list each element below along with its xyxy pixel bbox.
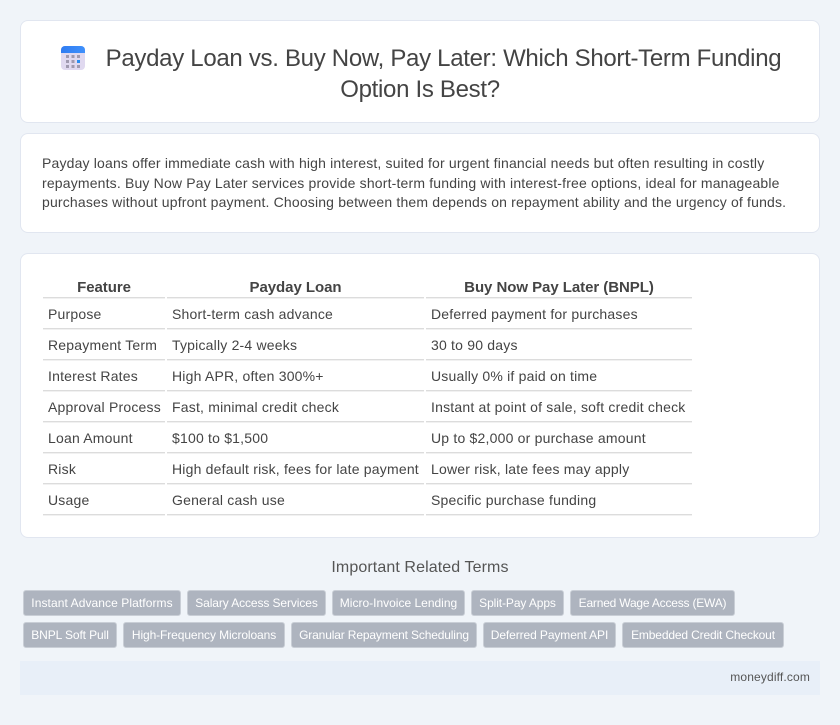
tag — [471, 590, 564, 616]
tag: Earned Wage Access (EWA) — [579, 596, 726, 610]
panel: description — [20, 133, 820, 233]
table: feature comparison: 30 to 90 days — [431, 337, 518, 353]
tag — [123, 622, 285, 648]
table: feature comparison — [43, 279, 692, 516]
tag — [622, 622, 784, 648]
tag: Micro-Invoice Lending — [340, 596, 457, 610]
tag: Instant Advance Platforms — [31, 596, 173, 610]
table: feature comparison: Repayment Term — [48, 337, 157, 353]
table: feature comparison: Specific purchase funding — [431, 492, 596, 508]
tag: BNPL Soft Pull — [31, 628, 109, 642]
table: feature comparison: Deferred payment for purchases — [431, 306, 638, 322]
table: feature comparison: Usually 0% if paid on time — [431, 368, 597, 384]
tag — [23, 590, 181, 616]
tag — [570, 590, 735, 616]
tag: Deferred Payment API — [491, 628, 608, 642]
table: feature comparison: Up to $2,000 or purchase amount — [431, 430, 646, 446]
text: summary paragraph: Payday loans offer immediate cash with high interest, suited for urgent financial needs but often resulting in costly — [42, 155, 764, 171]
table: feature comparison: Fast, minimal credit check — [172, 399, 339, 415]
title: Option Is Best? — [340, 76, 500, 103]
text: summary paragraph: purchases without upfront payment. Choosing between them depends on repayment ability and the urgency of funds. — [42, 194, 786, 210]
table: feature comparison: Usage — [48, 492, 89, 508]
table: feature comparison: General cash use — [172, 492, 285, 508]
tag: High-Frequency Microloans — [132, 628, 276, 642]
footer bar — [20, 661, 820, 695]
table: feature comparison: Purpose — [48, 306, 102, 322]
table: feature comparison: $100 to $1,500 — [172, 430, 268, 446]
tag group: related terms — [23, 590, 784, 648]
tag: Salary Access Services — [195, 596, 318, 610]
table: feature comparison: Risk — [48, 461, 76, 477]
table: feature comparison: Buy Now Pay Later (BNPL) — [464, 279, 654, 296]
title: Payday Loan vs. Buy Now, Pay Later: Which Short-Term Funding — [106, 45, 781, 72]
text: summary paragraph — [42, 155, 786, 210]
tag: Embedded Credit Checkout — [631, 628, 775, 642]
table: feature comparison: Approval Process — [48, 399, 161, 415]
table: feature comparison: Payday Loan — [250, 279, 341, 296]
table: feature comparison: Interest Rates — [48, 368, 138, 384]
table: feature comparison: Typically 2-4 weeks — [172, 337, 297, 353]
tag — [332, 590, 465, 616]
table: feature comparison: Loan Amount — [48, 430, 133, 446]
table: feature comparison: Lower risk, late fees may apply — [431, 461, 629, 477]
table: feature comparison: High default risk, fees for late payment — [172, 461, 419, 477]
text: summary paragraph: repayments. Buy Now Pay Later services provide short-term funding with interest-free options, ideal for manageable — [42, 175, 780, 191]
table: feature comparison: Feature — [77, 279, 131, 296]
tag: Granular Repayment Scheduling — [299, 628, 469, 642]
panel: header — [20, 20, 820, 123]
title — [106, 45, 781, 103]
panel: comparison table — [20, 253, 820, 538]
heading: related terms: Important Related Terms — [331, 559, 509, 576]
tag — [187, 590, 326, 616]
table: feature comparison: Short-term cash advance — [172, 306, 333, 322]
table: feature comparison: High APR, often 300%+ — [172, 368, 324, 384]
table: feature comparison: Instant at point of sale, soft credit check — [431, 399, 686, 415]
text: site credit: moneydiff.com — [730, 670, 810, 684]
icon: calendar — [61, 46, 85, 70]
tag — [483, 622, 616, 648]
tag — [291, 622, 477, 648]
tag: Split-Pay Apps — [479, 596, 556, 610]
tag — [23, 622, 117, 648]
